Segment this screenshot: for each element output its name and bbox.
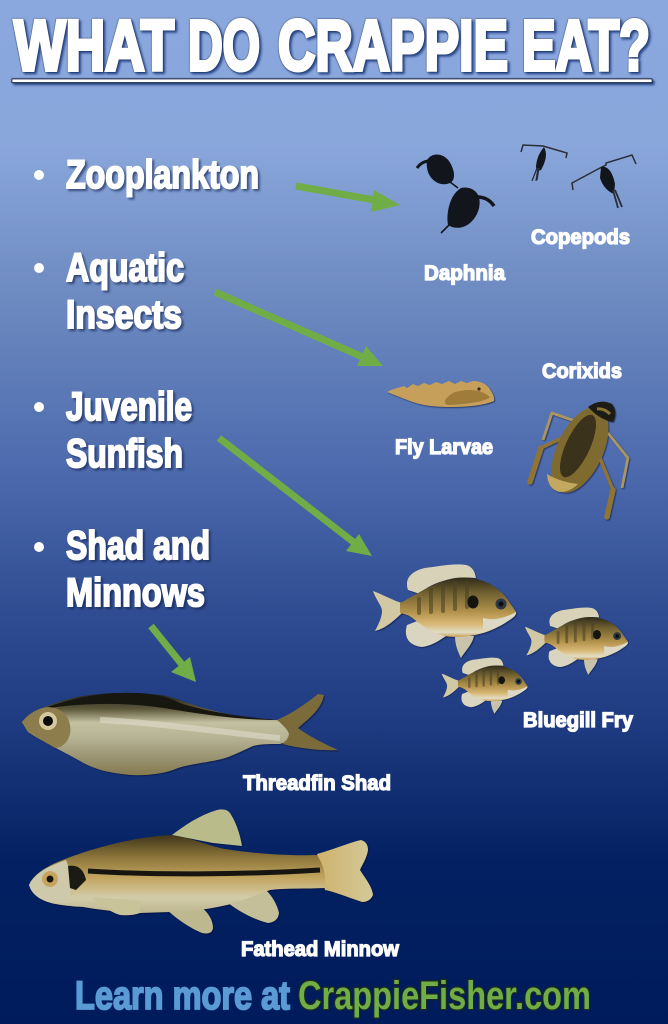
label: Threadfin Shad: Threadfin Shad	[243, 771, 391, 795]
bullet: Shad and Minnows: Shad and	[66, 524, 210, 568]
icon: copepods pair	[521, 145, 636, 208]
footer call to action: Learn more at	[75, 974, 290, 1018]
label: Copepods: Copepods	[531, 225, 630, 249]
fish: threadfin shad	[22, 693, 338, 775]
fish: medium bluegill fry	[525, 608, 628, 675]
fish: large bluegill fry	[373, 564, 516, 658]
bullet: Zooplankton: Zooplankton	[66, 153, 259, 197]
icon: corixid water bug	[530, 399, 628, 517]
fish: fathead minnow	[29, 809, 373, 933]
icon: fly larva	[387, 381, 494, 407]
bullet: Shad and Minnows: Minnows	[66, 571, 205, 615]
footer call to action	[75, 974, 591, 1018]
label: Fly Larvae: Fly Larvae	[395, 435, 493, 459]
label: Bluegill Fry: Bluegill Fry	[523, 708, 633, 732]
fish: small bluegill fry	[442, 658, 528, 714]
bullet: Juvenile Sunfish: Juvenile	[66, 385, 192, 429]
icon: daphnia pair	[417, 154, 494, 233]
bullet: Shad and Minnows	[34, 524, 210, 615]
bullet: Juvenile Sunfish	[34, 385, 192, 476]
bullet: Aquatic Insects: Aquatic	[66, 246, 184, 290]
title	[12, 7, 652, 86]
arrow: shad and minnows down to threadfin shad	[151, 626, 196, 682]
label: Fathead Minnow: Fathead Minnow	[241, 937, 399, 961]
arrow: zooplankton to daphnia	[296, 186, 400, 212]
bullet: Aquatic Insects: Insects	[66, 293, 182, 337]
footer call to action: CrappieFisher.com	[298, 974, 591, 1018]
bullet: Juvenile Sunfish: Sunfish	[66, 432, 183, 476]
title: DO	[188, 7, 260, 86]
label: Corixids: Corixids	[542, 359, 622, 383]
bullet: Aquatic Insects	[34, 246, 184, 337]
title: WHAT	[14, 7, 174, 86]
arrow: insects to fly larvae	[215, 292, 383, 366]
title: CRAPPIE	[278, 7, 508, 86]
label: Daphnia: Daphnia	[424, 261, 506, 285]
arrow: sunfish to bluegill	[219, 438, 372, 556]
